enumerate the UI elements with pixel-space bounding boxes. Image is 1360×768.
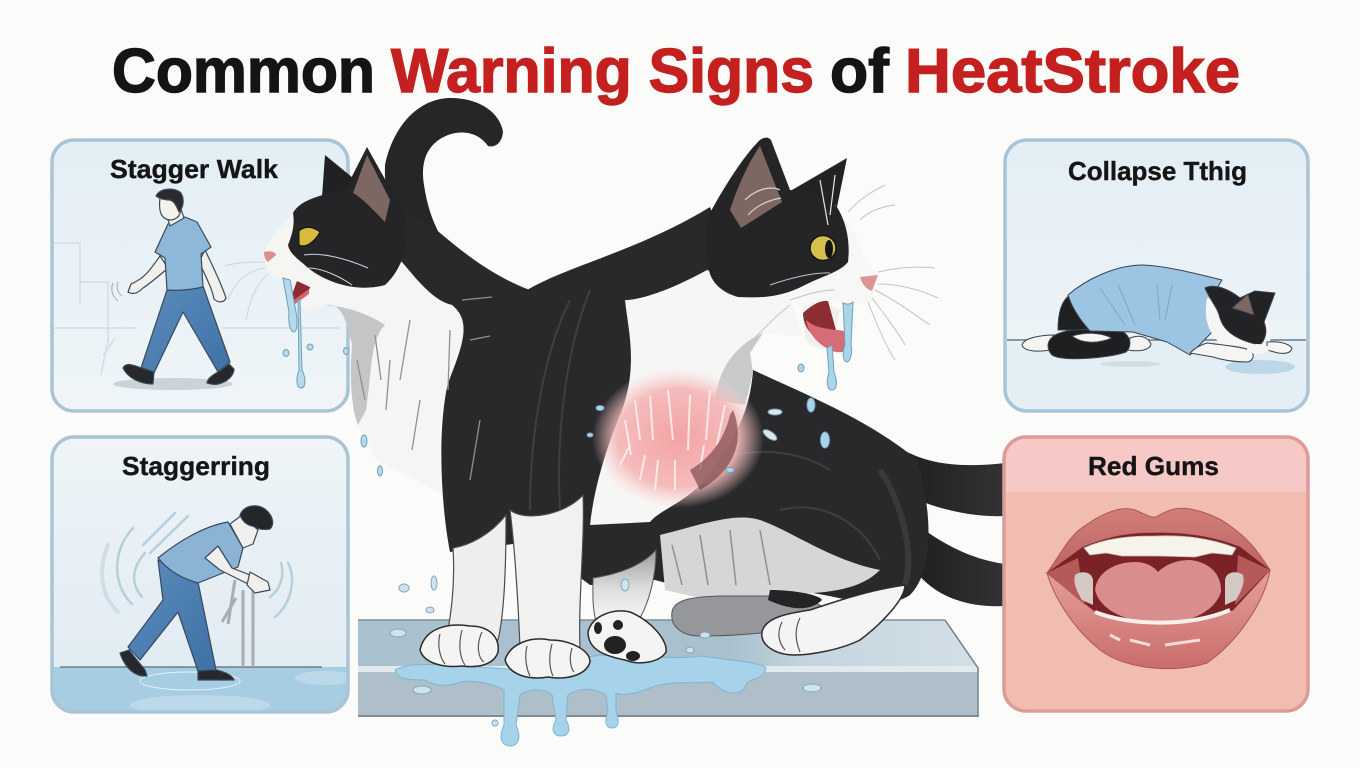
water drops [390, 576, 821, 726]
back cat white chest [264, 200, 464, 494]
panel: red gums [1004, 437, 1308, 711]
lower teeth [1095, 610, 1230, 623]
water puddle [395, 655, 766, 746]
back cat [225, 147, 545, 552]
front cat rear gray leg [672, 596, 835, 636]
paws [420, 611, 666, 678]
front cat mouth and tongue [803, 301, 840, 345]
title: Warning Signs [391, 37, 814, 106]
back cat body [395, 205, 545, 552]
front cat pink irritated patch [592, 368, 764, 508]
collapsed cat white neck [1206, 298, 1270, 351]
back cat leg [447, 515, 506, 640]
front cat drool [587, 302, 853, 472]
paw 2 [505, 639, 590, 678]
icon: walking man [112, 189, 234, 390]
lower lip [1047, 570, 1270, 669]
back cat head [288, 147, 407, 288]
lip highlights [1110, 635, 1200, 645]
icon: stooped man with walker [120, 506, 273, 680]
cat legs [447, 495, 583, 648]
platform [358, 620, 980, 717]
label: Collapse Tthig [1068, 156, 1247, 186]
back cat fur strokes [357, 297, 520, 480]
back cat drool [283, 278, 382, 476]
front cat leg [510, 495, 583, 648]
back cat tail [385, 98, 503, 240]
back cat ears [322, 155, 353, 197]
upper lip [1047, 508, 1270, 573]
label: Red Gums [1088, 451, 1219, 481]
front cat whiskers [748, 185, 938, 360]
collapsed cat head [1205, 286, 1275, 345]
paw 1 [420, 625, 498, 667]
front cat belly [660, 518, 880, 598]
panel: collapse [1005, 140, 1308, 412]
panel: staggerring [52, 437, 355, 715]
paw 3 [588, 611, 666, 663]
label: Staggerring [122, 451, 270, 481]
back cat nose [264, 251, 276, 262]
front cat white chest [590, 270, 803, 525]
front cat body [501, 207, 929, 603]
front cat head [706, 138, 849, 297]
title: HeatStroke [905, 37, 1240, 106]
front cat middle leg [593, 550, 656, 622]
toe lines [439, 630, 574, 676]
icon: open mouth [1047, 508, 1270, 669]
front cat nose [860, 275, 878, 291]
title: Common [112, 37, 375, 106]
upper teeth [1084, 536, 1236, 557]
back cat mouth [289, 281, 310, 303]
title [112, 37, 1240, 106]
front cat eye [810, 236, 836, 260]
icon: motion arcs [102, 513, 292, 617]
front cat rear white leg [762, 585, 905, 655]
back cat inner ear [353, 155, 390, 222]
back cat eye [299, 227, 320, 246]
paw pads [594, 620, 640, 661]
back cat whiskers [225, 254, 368, 320]
tongue [1095, 560, 1221, 624]
front cat tails [895, 445, 1006, 606]
panel: stagger walk [52, 140, 348, 411]
front cat lower jaw [803, 300, 840, 349]
front cat inner ear [730, 146, 782, 228]
collapsed cat arm [1190, 343, 1253, 362]
label: Stagger Walk [110, 154, 279, 184]
mouth interior [1047, 533, 1270, 624]
title: of [830, 37, 889, 106]
icon: collapsed cat in shirt [1022, 265, 1292, 362]
front cat far ear [792, 158, 847, 207]
side teeth [1074, 572, 1244, 605]
front cat face white [790, 205, 878, 310]
front cat [501, 138, 938, 655]
